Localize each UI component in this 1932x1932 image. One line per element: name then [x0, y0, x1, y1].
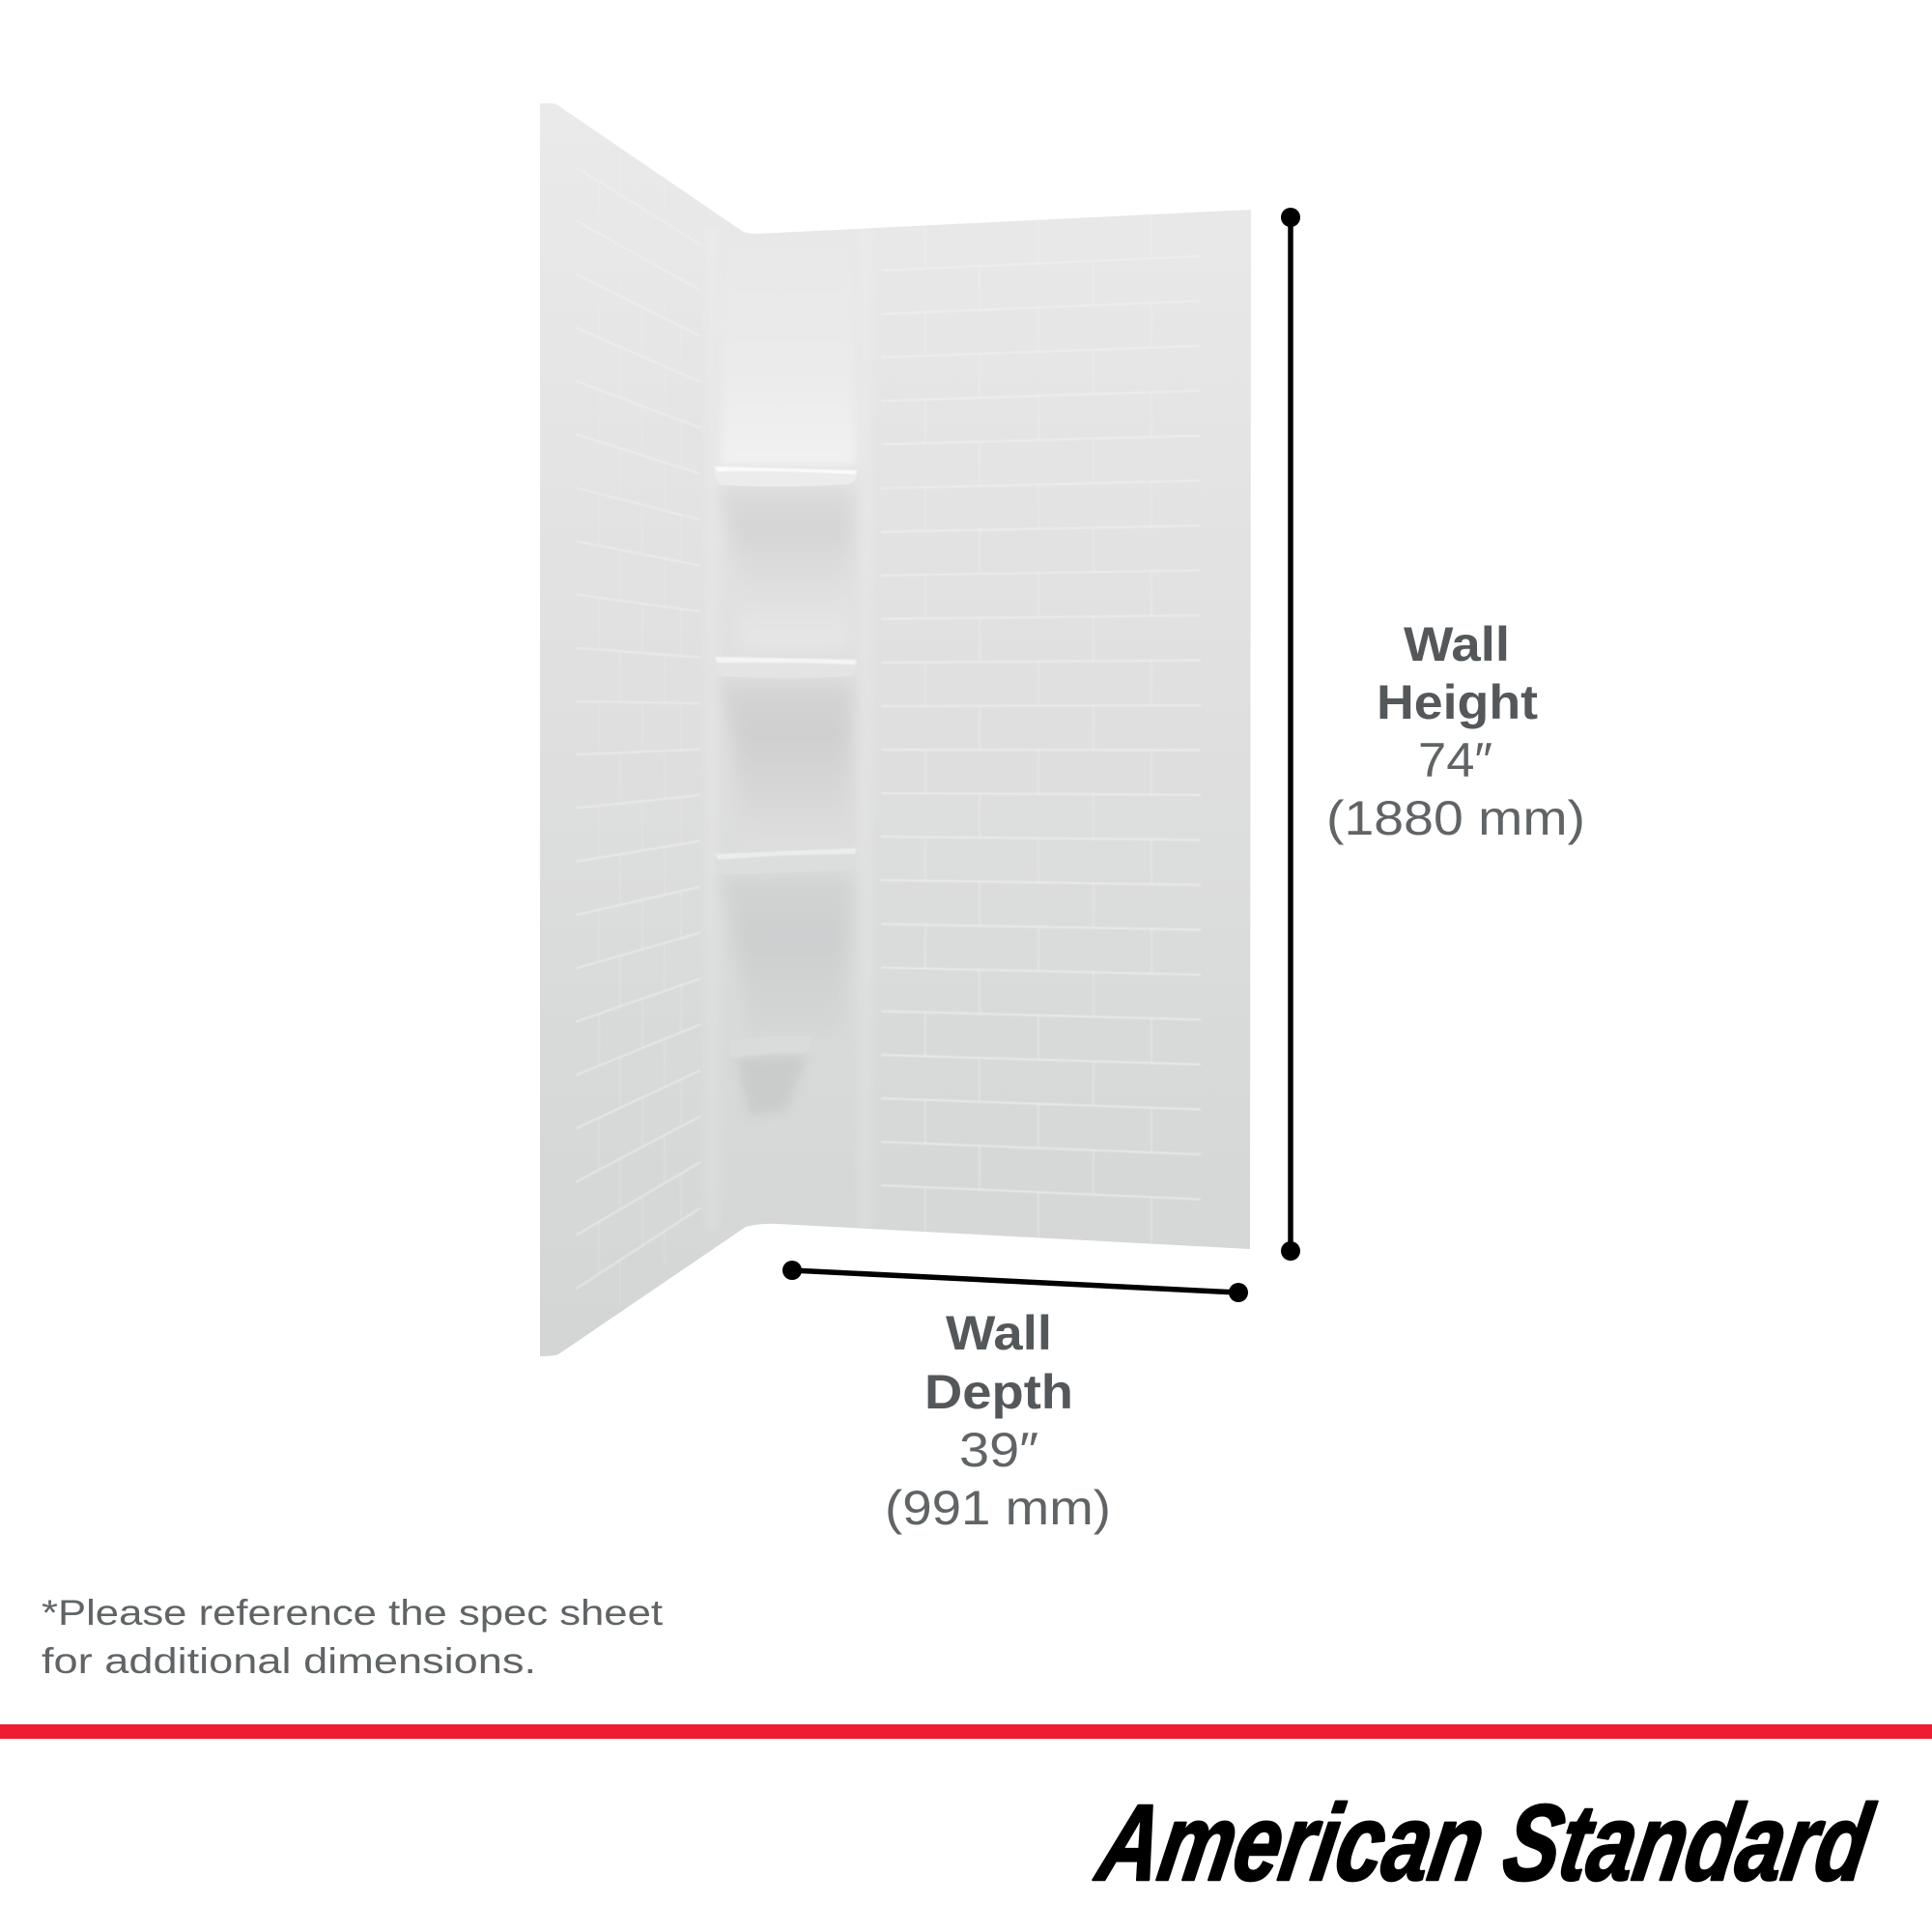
- corner shelf column: [576, 394, 1299, 1289]
- wall height label: (1880 mm): [1326, 791, 1585, 845]
- wall height label: 74″: [1418, 733, 1492, 787]
- wall height label: [1326, 617, 1585, 845]
- red divider bar: [0, 1724, 1932, 1739]
- wall depth label: Depth: [924, 1365, 1073, 1419]
- shower wall product illustration: [540, 103, 1251, 1356]
- footnote: [42, 1593, 664, 1681]
- niche shadow 2: [726, 686, 851, 790]
- wall height label: Wall: [1404, 617, 1510, 671]
- niche shadow 3: [728, 882, 848, 995]
- wall height dimension line: [1281, 208, 1300, 1261]
- shelf 2: [715, 657, 857, 678]
- wall depth label: [885, 1306, 1111, 1535]
- shelf 1: [715, 467, 857, 487]
- niche shadow 4: [739, 1057, 802, 1113]
- wall depth label: (991 mm): [885, 1481, 1111, 1535]
- wall height label: Height: [1377, 675, 1538, 729]
- wall surround base shape: [540, 103, 1251, 1356]
- wall depth label: 39″: [959, 1423, 1038, 1477]
- wall depth label: Wall: [946, 1306, 1052, 1360]
- niche shadow 1: [728, 494, 850, 560]
- footnote: *Please reference the spec sheet: [42, 1593, 664, 1633]
- shelf 4: [730, 1036, 811, 1058]
- wall depth dimension line: [782, 1261, 1248, 1302]
- right wall tile joints: [881, 394, 1201, 1240]
- footnote: for additional dimensions.: [42, 1641, 536, 1681]
- shelf 3: [716, 848, 856, 860]
- left wall tile joints: [576, 597, 700, 1289]
- column side strips: [705, 227, 873, 1232]
- upper niche highlight: [723, 403, 854, 464]
